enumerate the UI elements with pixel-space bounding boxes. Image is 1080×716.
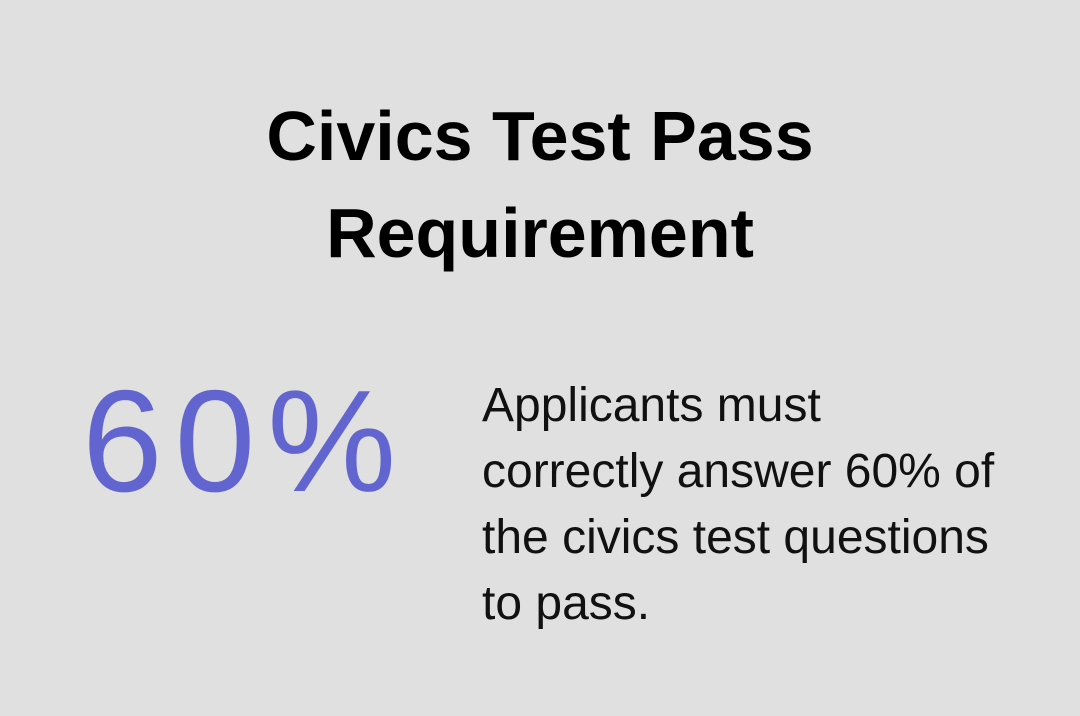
description text: to pass. <box>482 577 650 630</box>
description text: the civics test questions <box>482 511 989 564</box>
title <box>266 97 814 272</box>
title: Requirement <box>326 194 754 272</box>
description text: correctly answer 60% of <box>482 445 994 498</box>
title: Civics Test Pass <box>266 97 814 175</box>
description text <box>482 379 994 630</box>
stat: 60%: 60% <box>82 360 408 522</box>
description text: Applicants must <box>482 379 821 432</box>
